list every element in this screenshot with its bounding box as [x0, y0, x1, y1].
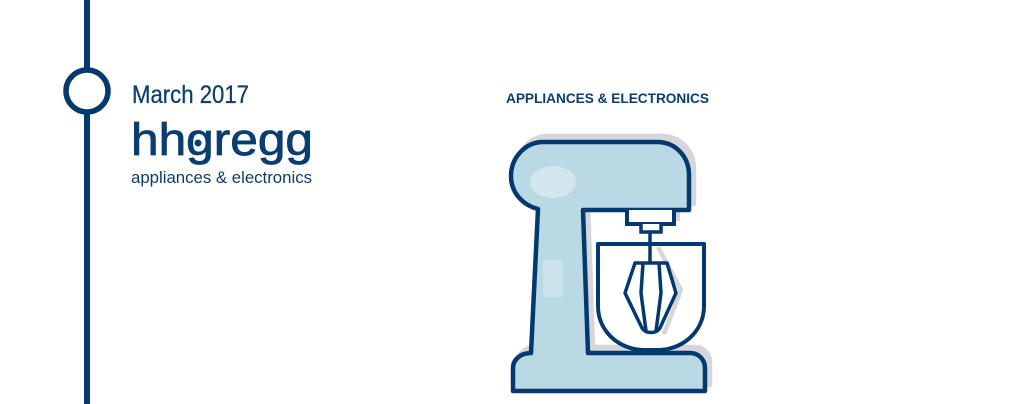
- icon: stand mixer: [511, 136, 710, 391]
- logo wordmark: hhgregg: [131, 114, 313, 165]
- head highlight: [530, 166, 576, 198]
- mixer shadow: [516, 136, 710, 385]
- beater socket: [641, 224, 661, 232]
- neck highlight: [543, 260, 563, 297]
- motor collar: [627, 210, 674, 224]
- logo dot: [194, 140, 202, 146]
- timeline marker: [66, 70, 108, 112]
- mixing bowl: [598, 244, 704, 350]
- category heading: APPLIANCES & ELECTRONICS: [506, 91, 709, 106]
- logo tagline: appliances & electronics: [131, 169, 312, 187]
- date label: March 2017: [132, 81, 249, 109]
- beater shaft: [648, 232, 652, 263]
- collar shadow: [674, 208, 680, 221]
- whisk: [625, 263, 676, 332]
- timeline line: [84, 0, 90, 404]
- whisk shadow: [658, 247, 681, 334]
- brand logo: [131, 114, 313, 187]
- mixer body: [511, 142, 705, 391]
